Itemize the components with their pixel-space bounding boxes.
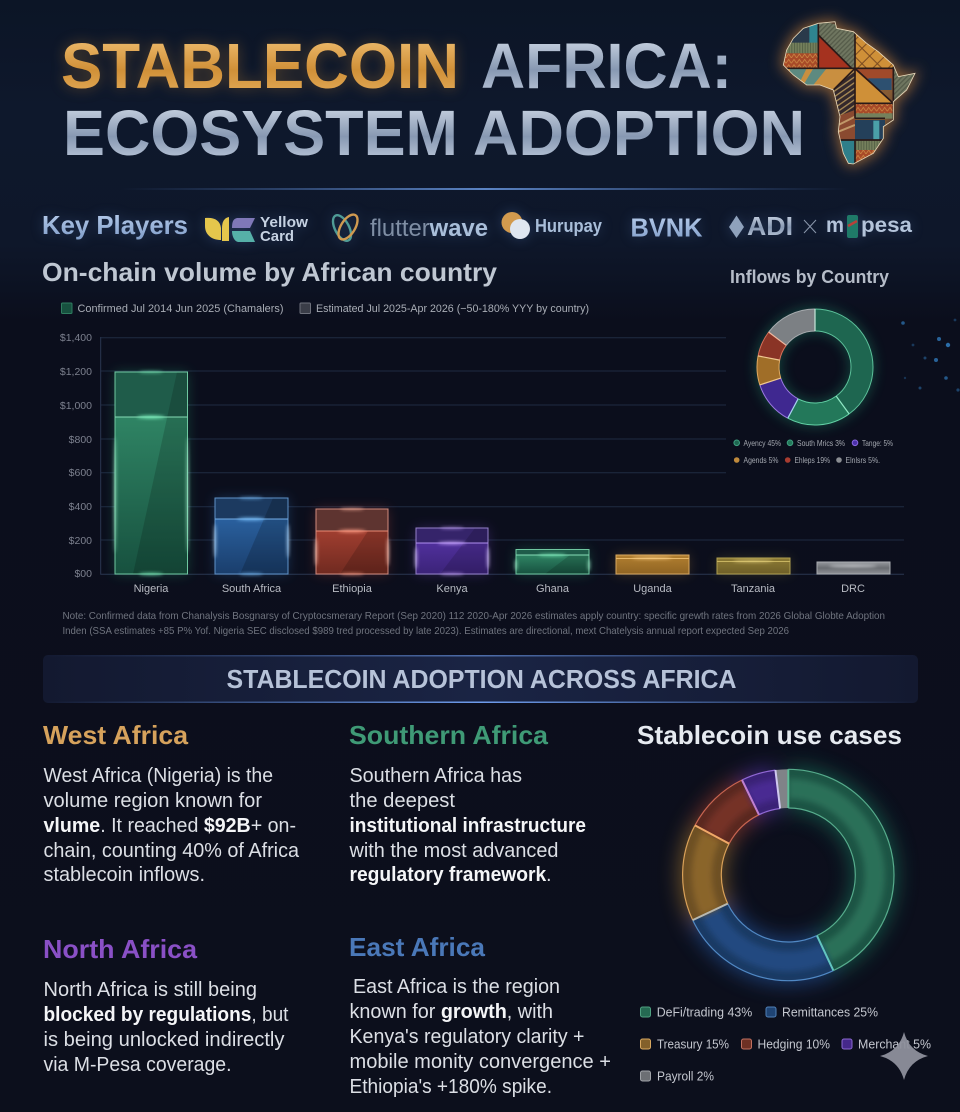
y axis labels: $400 [69,501,92,513]
logo: ADI x M-Pesa: m [826,214,844,237]
x axis labels: Nigeria [134,583,169,595]
icon: patterned Africa map [780,20,918,167]
x axis labels: Ghana [536,583,570,595]
donut legend: inflows [734,438,893,465]
bar: Ghana [515,550,590,574]
body text: Southern Africa [349,765,586,886]
body text: East Africa: Kenya's regulatory clarity + [350,1026,584,1048]
chart legend: Confirmed Jul 2014 Jun 2025 (Chamalers) [78,303,284,315]
bar: South Africa [214,497,289,575]
x axis labels: Tanzania [731,583,776,595]
y axis labels: $800 [69,434,92,446]
donut chart: use cases [645,732,931,1018]
chart note [62,610,885,637]
donut legend: inflows: Ayency 45% [744,438,781,448]
bar: Uganda [616,555,689,574]
y axis labels: $1,200 [60,366,92,378]
body text: Southern Africa: Southern Africa has [350,765,522,787]
body text: North Africa: via M-Pesa coverage. [44,1054,232,1076]
x axis labels: Ethiopia [332,583,373,595]
y axis labels [60,332,92,580]
heading: key players: Key Players [42,210,188,240]
body text: East Africa [350,976,611,1098]
body text: Southern Africa: regulatory framework. [350,864,552,886]
body text: West Africa: volume region known for [44,790,262,812]
chart legend [62,303,589,315]
bar: Ethiopia [315,508,389,575]
legend: use cases: Merchant 5% [858,1038,931,1052]
logo: Yellow Card: Yellow [260,214,308,231]
chart note: Inden (SSA estimates +85 P% Yof. Nigeria SEC disclosed $989 tred processed by late 2023). Estimates are directional, mext Chatelysis annual report expected Sep 2026 [62,625,789,637]
body text: Southern Africa: the deepest [350,790,455,812]
body text: East Africa: mobile monity convergence + [350,1051,611,1073]
y axis labels: $600 [69,467,92,479]
heading: on-chain volume: On-chain volume by African country [42,257,498,287]
donut legend: inflows: Ehleps 19% [794,455,830,465]
body text: North Africa [44,979,289,1076]
body text: North Africa: blocked by regulations, but [44,1004,289,1026]
bar: Tanzania [717,558,790,574]
icon: sparkle watermark [880,1032,928,1080]
key players row [42,210,912,245]
region: East Africa: East Africa [349,932,486,962]
body text: West Africa: vlume. It reached $92B+ on- [44,815,296,837]
y axis labels: $200 [69,535,92,547]
y axis labels: $1,000 [60,400,92,412]
logo: Hurupay [502,212,602,239]
heading: inflows by country: Inflows by Country [730,267,889,287]
donut legend: inflows: Elnlsrs 5%. [846,455,880,465]
region: North Africa: North Africa [43,934,198,964]
body text: East Africa: known for growth, with [350,1001,553,1023]
section banner [43,655,918,703]
x axis labels [134,583,865,595]
x axis labels: DRC [841,583,865,595]
legend: use cases [640,1006,931,1084]
chart note: Note: Confirmed data from Chanalysis Bosgnarsy of Cryptocsmerary Report (Sep 2020) 112 2020-Apr 2026 estimates apply country: specific grewth rates from 2026 Global Globte Adoption [62,610,885,622]
body text: West Africa: chain, counting 40% of Africa [44,840,300,862]
legend: use cases: DeFi/trading 43% [657,1006,752,1020]
logo: ADI x M-Pesa [729,211,912,241]
logo: ADI x M-Pesa: ADI [747,211,793,241]
body text: Southern Africa: institutional infrastructure [350,815,586,837]
body text: Southern Africa: with the most advanced [349,840,558,862]
donut legend: inflows: Tange: 5% [862,438,893,448]
logo: Yellow Card [205,214,308,245]
bar: DRC [817,562,890,574]
legend: use cases: Hedging 10% [758,1038,830,1052]
legend: use cases: Treasury 15% [657,1038,729,1052]
logo: Yellow Card: Card [260,228,294,245]
bar: Nigeria [114,371,188,575]
y axis labels: $00 [74,568,92,580]
region: West Africa [43,720,300,886]
body text: West Africa [44,765,300,886]
region: East Africa [349,932,611,1098]
heading: stablecoin use cases: Stablecoin use cases [637,720,902,750]
title: AFRICA: [481,30,732,102]
donut legend: inflows: South Mrics 3% [797,438,845,448]
donut legend: inflows: Agends 5% [744,455,779,465]
logo: BVNK: BVNK [630,212,703,242]
region: West Africa: West Africa [43,720,189,750]
logo: ADI x M-Pesa: pesa [861,214,912,237]
title: STABLECOIN [61,30,459,102]
region: North Africa [43,934,289,1076]
logo: flutterwave [329,211,488,244]
legend: use cases: Remittances 25% [782,1006,878,1020]
title [61,30,805,169]
title: ECOSYSTEM ADOPTION [63,97,805,169]
bar: Kenya [415,527,489,575]
y axis labels: $1,400 [60,332,92,344]
logo: Hurupay: Hurupay [535,216,602,236]
region: Southern Africa [349,720,586,886]
logo: flutterwave: flutterwave [370,215,488,242]
body text: West Africa: stablecoin inflows. [44,864,205,886]
donut chart: inflows by country [734,286,896,448]
chart legend: Estimated Jul 2025-Apr 2026 (−50-180% YYY by country) [316,303,589,315]
legend: use cases: Payroll 2% [657,1070,714,1084]
body text: East Africa: East Africa is the region [353,976,560,998]
body text: West Africa: West Africa (Nigeria) is the [44,765,273,787]
x axis labels: South Africa [222,583,282,595]
x axis labels: Kenya [436,583,468,595]
region: Southern Africa: Southern Africa [349,720,549,750]
body text: North Africa: North Africa is still being [44,979,257,1001]
section banner: STABLECOIN ADOPTION ACROSS AFRICA [226,666,736,694]
x axis labels: Uganda [633,583,673,595]
body text: North Africa: is being unlocked indirectly [44,1029,284,1051]
bar chart: on-chain volume [60,332,904,595]
body text: East Africa: Ethiopia's +180% spike. [350,1076,552,1098]
